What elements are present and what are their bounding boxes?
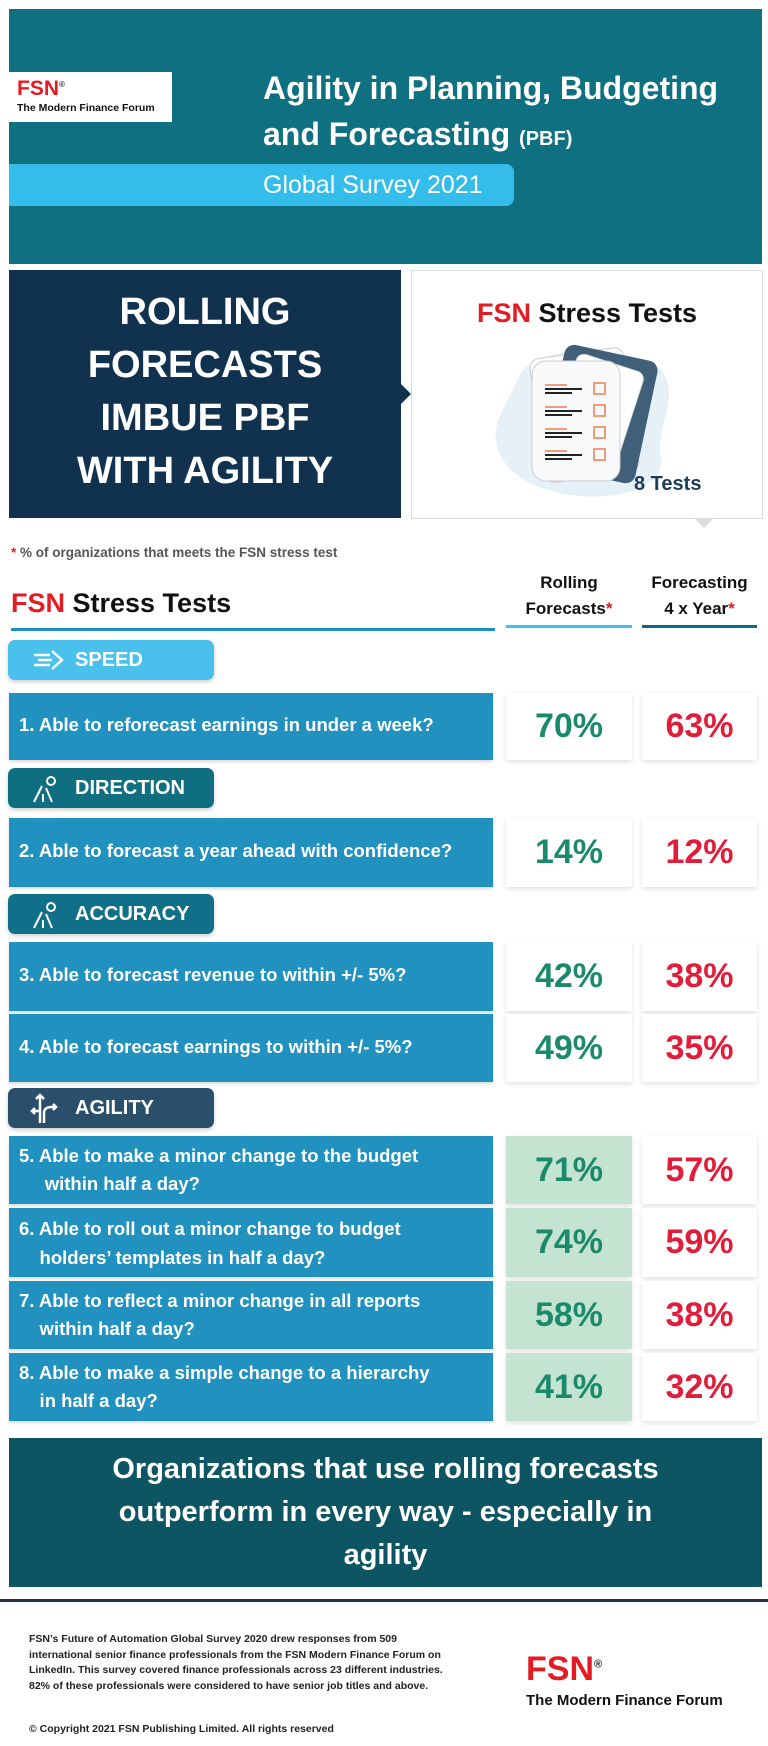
- row 1: [9, 693, 493, 760]
- badge: accuracy: ACCURACY: [75, 903, 189, 925]
- row 3: 3. Able to forecast revenue to within +/- 5%?: [19, 964, 406, 985]
- row 7: [9, 1281, 493, 1349]
- footnote: * % of organizations that meets the FSN stress test: [11, 545, 337, 560]
- text: 32%: [665, 1368, 734, 1406]
- footer text: FSN’s Future of Automation Global Survey 2020 drew responses from 509 international senior finance professionals from the FSN Modern Finance Forum on LinkedIn. This survey covered finance professionals across 23 different industries. 82% of these professionals were considered to have senior job titles and above.: [29, 1633, 446, 1692]
- text: 58%: [535, 1296, 603, 1334]
- conclusion: agility: [344, 1539, 427, 1571]
- row 6: [9, 1208, 493, 1277]
- panel: stress tests intro: [411, 270, 763, 519]
- badge: direction: [8, 768, 214, 808]
- column header: forecasting 4x year: 4 x Year*: [664, 599, 735, 618]
- badge: agility: AGILITY: [75, 1097, 154, 1119]
- text: 57%: [665, 1151, 734, 1189]
- row 1: 1. Able to reforecast earnings in under a week?: [19, 714, 434, 735]
- column header: forecasting 4x year: [642, 570, 757, 628]
- row 6: 6. Able to roll out a minor change to budget: [19, 1218, 401, 1239]
- table heading: [11, 588, 495, 631]
- text: 63%: [665, 707, 734, 745]
- row 2: 2. Able to forecast a year ahead with confidence?: [19, 840, 452, 861]
- heading: FSN Stress Tests: [477, 298, 697, 328]
- footer logo: [526, 1650, 723, 1709]
- text: 14%: [535, 833, 603, 871]
- text: 59%: [665, 1223, 734, 1261]
- row 4: [9, 1014, 493, 1082]
- column header: forecasting 4x year: Forecasting: [651, 573, 748, 592]
- text: 38%: [665, 957, 734, 995]
- badge: direction: DIRECTION: [75, 777, 185, 799]
- badge: accuracy: [8, 894, 214, 934]
- column header: rolling forecasts: [506, 570, 632, 628]
- logo box: The Modern Finance Forum: [17, 102, 155, 114]
- headline panel: ROLLING: [120, 291, 290, 333]
- logo box: FSN®: [17, 77, 65, 100]
- title: and Forecasting (PBF): [263, 116, 572, 152]
- title: [263, 70, 718, 152]
- row 3: [9, 942, 493, 1011]
- text: 35%: [665, 1029, 734, 1067]
- text: 49%: [535, 1029, 603, 1067]
- row 6: holders’ templates in half a day?: [40, 1247, 325, 1268]
- conclusion: outperform in every way - especially in: [119, 1496, 652, 1528]
- footer logo: FSN®: [526, 1650, 602, 1688]
- headline panel: [9, 270, 401, 518]
- row 8: 8. Able to make a simple change to a hierarchy: [19, 1362, 430, 1383]
- label: 8 tests: 8 Tests: [634, 473, 701, 495]
- row 2: [9, 818, 493, 887]
- title: Agility in Planning, Budgeting: [263, 70, 718, 106]
- text: 74%: [535, 1223, 603, 1261]
- headline panel: IMBUE PBF: [100, 397, 310, 439]
- text: 41%: [535, 1368, 603, 1406]
- row 4: 4. Able to forecast earnings to within +/- 5%?: [19, 1036, 413, 1057]
- conclusion: Organizations that use rolling forecasts: [112, 1453, 659, 1485]
- conclusion: [9, 1438, 762, 1587]
- subtitle bar: Global Survey 2021: [263, 171, 483, 199]
- text: 42%: [535, 957, 603, 995]
- badge: speed: [8, 640, 214, 680]
- badge: agility: [8, 1088, 214, 1128]
- badge: speed: SPEED: [75, 649, 143, 671]
- row 7: 7. Able to reflect a minor change in all reports: [19, 1290, 420, 1311]
- icon: checklist: [496, 344, 669, 496]
- text: 38%: [665, 1296, 734, 1334]
- column header: rolling forecasts: Rolling: [540, 573, 598, 592]
- header banner: [9, 9, 762, 264]
- column header: rolling forecasts: Forecasts*: [526, 599, 612, 618]
- headline panel: WITH AGILITY: [77, 450, 333, 492]
- text: 71%: [535, 1151, 603, 1189]
- headline panel: FORECASTS: [88, 344, 322, 386]
- logo box: [9, 72, 172, 122]
- subtitle bar: [9, 164, 514, 206]
- row 5: within half a day?: [45, 1173, 200, 1194]
- text: 70%: [535, 707, 603, 745]
- copyright: © Copyright 2021 FSN Publishing Limited. All rights reserved: [29, 1723, 334, 1735]
- row 8: in half a day?: [40, 1390, 158, 1411]
- row 8: [9, 1353, 493, 1421]
- text: 12%: [665, 833, 734, 871]
- row 5: 5. Able to make a minor change to the budget: [19, 1145, 418, 1166]
- table heading: FSN Stress Tests: [11, 588, 231, 618]
- footer logo: The Modern Finance Forum: [526, 1692, 723, 1709]
- row 5: [9, 1136, 493, 1204]
- row 7: within half a day?: [40, 1318, 195, 1339]
